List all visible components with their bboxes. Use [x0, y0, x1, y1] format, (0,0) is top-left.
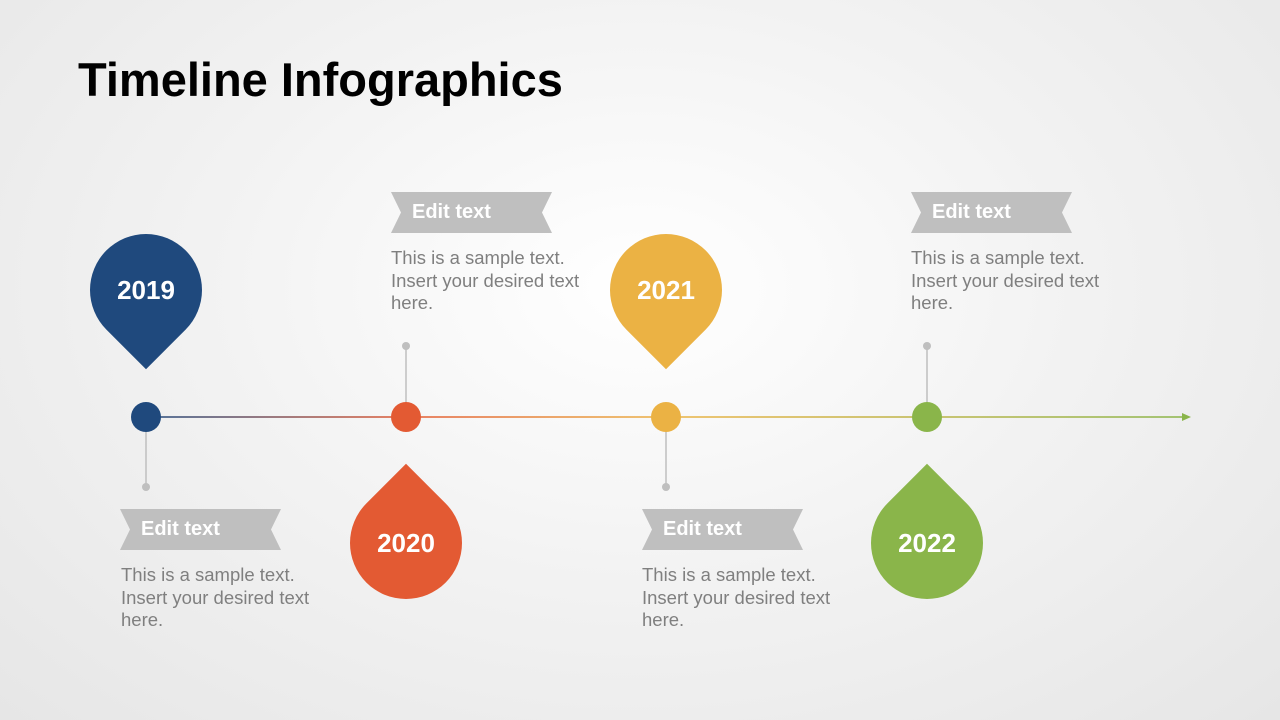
pin: 2019: 2019 — [117, 275, 175, 305]
ribbon 1: Edit text — [141, 518, 220, 540]
text 3: This is a sample text. Insert your desired text here. — [642, 564, 830, 630]
ribbon 4: Edit text — [932, 201, 1011, 223]
title: Timeline Infographics — [78, 53, 563, 106]
pin: 2021 — [610, 234, 722, 370]
ribbon 2: Edit text — [412, 201, 491, 223]
pin: 2022 — [871, 464, 983, 599]
ribbon 2 — [391, 192, 552, 233]
text 2: This is a sample text. Insert your desired text here. — [391, 247, 579, 313]
ribbon 3 — [642, 509, 803, 550]
text 4: This is a sample text. Insert your desired text here. — [911, 247, 1099, 313]
pin: 2019 — [90, 234, 202, 370]
pin: 2020 — [350, 464, 462, 599]
ribbon 3: Edit text — [663, 518, 742, 540]
text 1: This is a sample text. Insert your desired text here. — [121, 564, 309, 630]
ribbon 4 — [911, 192, 1072, 233]
ribbon 1 — [120, 509, 281, 550]
pin: 2020: 2020 — [377, 528, 435, 558]
pin: 2022: 2022 — [898, 528, 956, 558]
pin: 2021: 2021 — [637, 275, 695, 305]
